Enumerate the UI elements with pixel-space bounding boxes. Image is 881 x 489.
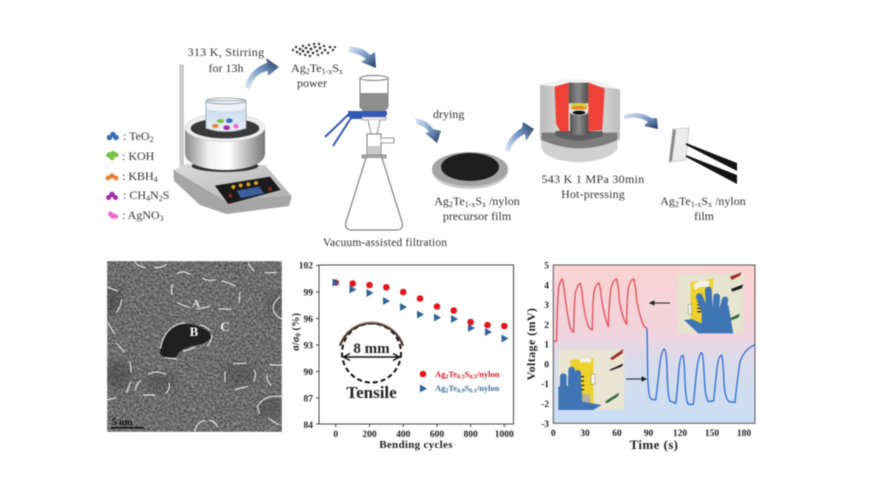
x axis label: Bending cycles (379, 439, 453, 451)
label: AgNO3: : AgNO (122, 208, 160, 222)
outlines: white dashed particle boundaries (107, 262, 282, 431)
icon: vacuum filtration flask (325, 76, 402, 230)
icon: powder particles (292, 43, 336, 57)
series: Ag2Te0.5S0.5 (332, 279, 508, 329)
legend: series: 0.5 (469, 374, 477, 380)
arrow: filtration to film (415, 118, 441, 143)
legend: series: S (465, 383, 470, 393)
legend: series: 0.9 (457, 388, 465, 394)
trace: red (553, 279, 647, 342)
y axis label: 0 (294, 333, 302, 337)
x tick labels: 600 (430, 430, 444, 440)
y tick labels: 102 (299, 262, 313, 272)
label: CH4N2S: 4 (146, 194, 150, 203)
legend: series: S (465, 369, 470, 379)
y tick labels: -1 (541, 380, 549, 390)
x tick labels: 30 (580, 429, 590, 439)
legend: series: Ag (435, 369, 445, 379)
series: Ag2Te0.9S0.1 (332, 278, 508, 342)
label: precursor film name: 2 (449, 200, 453, 209)
plot background (553, 265, 755, 423)
icon: magnetic stirrer with beaker (173, 65, 292, 214)
y tick labels: -3 (541, 420, 549, 430)
label: TeO2: : TeO (123, 129, 150, 143)
icon: film held by tweezers (669, 128, 737, 184)
label: final film name: /nylon (712, 194, 746, 208)
y tick labels: 4 (544, 281, 549, 291)
label: final film name: S (701, 194, 708, 208)
label: power: power (297, 76, 327, 90)
icon: CH4N2S (106, 192, 118, 200)
x tick labels: 180 (737, 429, 751, 439)
x tick labels: 0 (551, 429, 556, 439)
label: powder name: x (339, 67, 343, 76)
x tick labels: 120 (673, 429, 687, 439)
label: final film name: Ag (660, 194, 675, 208)
y tick labels: 87 (304, 394, 313, 404)
icon: hot press cutaway (540, 79, 620, 162)
y axis label: Voltage (mV) (524, 308, 538, 380)
image: TEM noise texture (102, 261, 284, 432)
x tick labels (551, 429, 751, 439)
photo: glove on film, top inset (678, 272, 743, 333)
label: final film name: x (708, 200, 712, 209)
y tick labels: 99 (304, 288, 313, 298)
x tick labels: 400 (396, 430, 411, 440)
label: precursor film name: Ag (434, 194, 449, 208)
y tick labels: 93 (304, 342, 313, 352)
x tick labels: 60 (612, 429, 622, 439)
legend: series: /nylon (476, 369, 500, 379)
x tick labels: 1000 (495, 430, 514, 440)
label: KBH4: : KBH (122, 169, 154, 183)
legend: series: 0.5 (457, 374, 465, 380)
x tick labels: 150 (705, 429, 719, 439)
label: film: film (694, 209, 715, 223)
panel: synthesis process schematic (106, 43, 746, 249)
inset: tensile bending diagram (340, 323, 403, 402)
x tick labels: 90 (644, 429, 654, 439)
label: precursor film name: S (475, 194, 482, 208)
inset: tensile bending diagram: Tensile (346, 383, 397, 402)
arrow: stirrer to powder (245, 58, 279, 89)
particle: dark region B (160, 324, 211, 358)
inset: tensile bending diagram: 8 mm (353, 341, 390, 357)
panel: voltage time chart (524, 262, 755, 452)
y tick labels: 5 (544, 262, 549, 272)
label: drying: drying (433, 107, 464, 121)
label: final film name: 1-x (691, 200, 701, 209)
x axis label: Time (s) (630, 437, 678, 452)
x tick labels: 0 (333, 430, 338, 440)
legend: series: 2 (445, 374, 448, 380)
legend: series (420, 369, 500, 394)
y tick labels: 90 (304, 368, 313, 378)
text: stirring time: for 13h (208, 61, 244, 75)
heading: stirring condition: 313 K, Stirring (188, 45, 264, 59)
y tick labels: 2 (544, 321, 549, 331)
y axis label: (%) (291, 313, 302, 333)
label: powder name: S (332, 61, 339, 75)
trace: blue (647, 328, 755, 404)
label: KOH: : KOH (122, 149, 155, 163)
icon: TeO2 (107, 132, 119, 140)
arrow: film to hot press (505, 122, 534, 152)
arrow: powder to filtration (349, 46, 376, 68)
label: A: A (192, 298, 200, 310)
legend: series: 2 (445, 388, 448, 394)
label: AgNO3: 3 (160, 214, 164, 223)
icon: KBH4 (106, 173, 118, 180)
label: precursor film name: Te (453, 194, 465, 208)
label: CH4N2S: N (150, 188, 159, 202)
y tick labels: 3 (544, 301, 549, 311)
label: final film name: 2 (675, 200, 679, 209)
label: vacuum filtration: Vacuum-assisted filtration (323, 237, 447, 249)
icon: AgNO3 (108, 212, 118, 219)
legend: series: Te (448, 383, 457, 393)
y tick labels: 84 (304, 421, 313, 431)
y tick labels (541, 262, 549, 430)
label: CH4N2S: : CH (123, 188, 146, 202)
label: precursor film: precursor film (443, 209, 512, 223)
label: C: C (220, 319, 230, 334)
label: hot pressing conditions: 543 K 1 MPa 30min (541, 172, 645, 186)
y tick labels (299, 262, 313, 431)
photo: glove on film, bottom inset (558, 349, 624, 410)
legend: series: /nylon (476, 383, 500, 393)
scale bar: 5 nm (112, 418, 132, 428)
legend: series: Te (448, 369, 457, 379)
y axis label: σ/σ (291, 337, 302, 351)
y tick labels: 96 (304, 315, 313, 325)
y tick labels: -2 (541, 400, 549, 410)
icon: precursor film disc (432, 152, 508, 189)
label: final film name: Te (679, 194, 691, 208)
label: KBH4: 4 (154, 175, 158, 184)
label: precursor film name: 1-x (465, 200, 475, 209)
label: TeO2: 2 (150, 135, 154, 144)
arrow: to red trace (650, 301, 670, 305)
label: powder name: 2 (306, 67, 310, 76)
panel: bending cycles chart (291, 262, 514, 451)
label: precursor film name: x (482, 200, 486, 209)
label: CH4N2S: S (163, 188, 169, 202)
label: hot pressing: Hot-pressing (561, 187, 625, 201)
x tick labels: 200 (362, 430, 377, 440)
chart frame and ticks (316, 265, 514, 427)
legend: series: 0.1 (469, 388, 477, 394)
traces (553, 279, 755, 404)
legend: series: Ag (435, 383, 445, 393)
arrow: hot press to final film (624, 113, 658, 129)
label: B: B (190, 324, 199, 339)
label: powder name: Te (310, 61, 322, 75)
label: precursor film name: /nylon (486, 194, 520, 208)
x tick labels (333, 430, 514, 440)
label: powder name: 1-x (322, 67, 332, 76)
legend: precursors (106, 129, 169, 223)
x tick labels: 800 (463, 430, 478, 440)
scale bar (111, 418, 144, 428)
y tick labels: 1 (544, 341, 549, 351)
panel: TEM micrograph (102, 261, 284, 432)
label: powder name: Ag (291, 61, 306, 75)
label: CH4N2S: 2 (159, 194, 163, 203)
arrow: to blue trace (626, 377, 646, 381)
icon: KOH (106, 151, 118, 160)
y tick labels: 0 (544, 360, 549, 370)
